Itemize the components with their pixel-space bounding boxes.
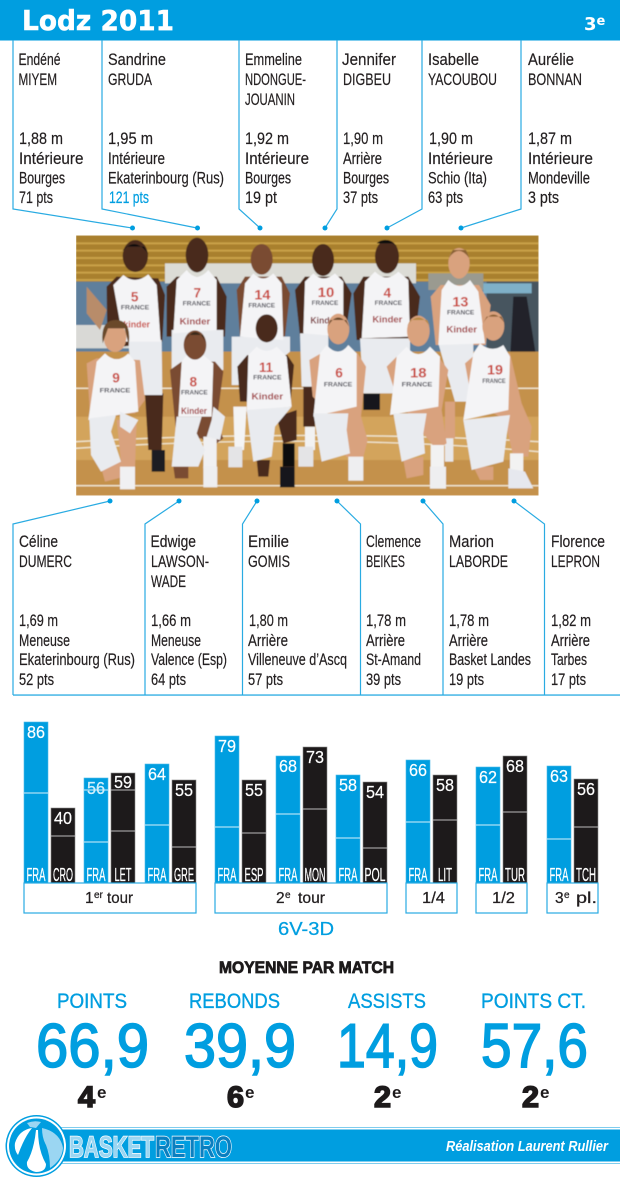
results bar chart xyxy=(24,722,598,885)
player label: Edwige Lawson-Wade: LAWSON- xyxy=(151,552,209,571)
player label: Sandrine Gruda: Intérieure xyxy=(108,149,165,168)
player label: Céline Dumerc: Céline xyxy=(19,532,58,551)
player label: Jennifer Digbeu xyxy=(322,40,396,230)
player 18 kneeling: 18 xyxy=(410,366,427,381)
bar: MON 73: MON xyxy=(304,865,326,885)
player label: Céline Dumerc: 1,69 m xyxy=(19,611,58,630)
player label: Marion Laborde: Arrière xyxy=(449,631,488,650)
bar: FRA 79: 79 xyxy=(218,736,236,756)
player label: Florence Lepron: Florence xyxy=(551,532,605,551)
bar: FRA 68: FRA xyxy=(278,865,298,885)
stat: rebonds: 39,9 xyxy=(184,1012,296,1081)
stat: rebonds xyxy=(184,990,296,1114)
team photo xyxy=(76,235,539,496)
player label: Emilie Gomis xyxy=(242,498,347,695)
player label: Florence Lepron: 1,82 m xyxy=(551,611,591,630)
round box: 1er tour xyxy=(24,883,196,913)
stat: assists: e xyxy=(392,1083,401,1102)
round box: 1/4 xyxy=(406,883,457,913)
bar: GRE 55: GRE xyxy=(174,865,194,885)
player 13 standing: 13 xyxy=(452,295,469,310)
stat: assists: 2 xyxy=(374,1081,391,1114)
player label: Edwige Lawson-Wade: Meneuse xyxy=(151,631,201,650)
logo wordmark: RETRO xyxy=(155,1131,232,1164)
player label: Edwige Lawson-Wade: WADE xyxy=(151,572,186,591)
player label: Clemence Beikes xyxy=(334,498,421,695)
player label: Marion Laborde: 19 pts xyxy=(449,670,484,689)
player 5 standing: FRANCE xyxy=(121,305,149,311)
player 7 standing xyxy=(167,238,227,370)
player label: Isabelle Yacoubou: 1,90 m xyxy=(429,129,473,148)
player label: Clemence Beikes: BEIKES xyxy=(366,552,405,571)
player 10 standing xyxy=(295,244,352,467)
player 13 standing: FRANCE xyxy=(447,310,474,316)
player label: Jennifer Digbeu: Bourges xyxy=(343,168,389,188)
bar: FRA 64: FRA xyxy=(148,865,166,885)
bar: FRA 66: FRA xyxy=(408,865,428,885)
player label: Isabelle Yacoubou: 63 pts xyxy=(428,188,463,207)
bar: TCH 56 xyxy=(574,779,598,885)
bar: FRA 58: 58 xyxy=(339,775,357,795)
player 14 standing xyxy=(228,244,290,467)
player 6 kneeling xyxy=(309,314,368,481)
player label: Emmeline Ndongue-Jouanin: 19 pt xyxy=(245,188,277,207)
round box: 2e tour xyxy=(215,883,387,913)
player 19 kneeling xyxy=(463,311,533,488)
player 8 kneeling: Kinder xyxy=(181,406,207,416)
player 14 standing: FRANCE xyxy=(248,304,275,310)
stat: assists: ASSISTS xyxy=(348,990,426,1013)
title: Lodz 2011 xyxy=(22,5,174,37)
player label: Jennifer Digbeu: 37 pts xyxy=(343,188,378,207)
stat: points xyxy=(36,990,149,1114)
round box: 3e place: pl. xyxy=(576,890,597,907)
player 18 kneeling xyxy=(387,316,448,489)
player 14 standing: 14 xyxy=(254,287,271,302)
player label: Edwige Lawson-Wade xyxy=(145,498,227,695)
player label: Marion Laborde: Marion xyxy=(449,532,494,551)
player label: Isabelle Yacoubou: Intérieure xyxy=(428,149,493,168)
player label: Emilie Gomis: Villeneuve d’Ascq xyxy=(248,650,347,669)
player 4 standing: Kinder xyxy=(372,314,403,324)
bar: LIT 58: 58 xyxy=(436,775,454,795)
player 10 standing: 10 xyxy=(318,285,335,300)
bar: MON 73: 73 xyxy=(306,747,324,767)
round box: 2e tour: tour xyxy=(298,890,325,907)
player label: Emilie Gomis: GOMIS xyxy=(248,552,290,571)
bar: FRA 56: FRA xyxy=(86,865,106,885)
player label: Marion Laborde: Basket Landes xyxy=(449,650,531,669)
stat: points: e xyxy=(97,1083,106,1102)
player label: Jennifer Digbeu: DIGBEU xyxy=(343,70,391,89)
stat: points contre: 57,6 xyxy=(481,1012,588,1081)
round box: 1er tour: tour xyxy=(107,890,133,907)
bar: LIT 58 xyxy=(433,775,457,885)
bar: GRE 55: 55 xyxy=(175,780,193,800)
player label: Sandrine Gruda: Sandrine xyxy=(108,50,166,69)
stat: rebonds: e xyxy=(245,1083,254,1102)
round box: 1/2 xyxy=(476,883,527,913)
stat: points contre: e xyxy=(540,1083,549,1102)
player 5 standing xyxy=(107,240,165,472)
bar: TUR 68: 68 xyxy=(506,756,524,776)
bar: LIT 58: LIT xyxy=(438,865,452,885)
bar: TCH 56: TCH xyxy=(576,865,596,885)
player label: Clemence Beikes: 1,78 m xyxy=(366,611,406,630)
player 8 kneeling: 8 xyxy=(190,374,198,389)
bar: FRA 86 xyxy=(24,722,48,885)
logo wordmark: BASKET xyxy=(69,1131,154,1164)
player 8 kneeling xyxy=(170,330,225,487)
player label: Sandrine Gruda: 121 pts xyxy=(109,188,149,207)
player 10 standing: Kind xyxy=(310,316,330,326)
bar: FRA 64 xyxy=(145,764,169,885)
player label: Jennifer Digbeu: Arrière xyxy=(343,149,382,168)
bar: FRA 56: 56 xyxy=(87,778,105,798)
bar: POL 54: POL xyxy=(364,865,386,885)
player label: Sandrine Gruda: 1,95 m xyxy=(108,129,153,148)
player label: Endéné Miyem: Endéné xyxy=(18,50,60,69)
round box: 1/2: 1/2 xyxy=(492,890,515,907)
player label: Emilie Gomis: Arrière xyxy=(248,631,288,650)
stat: points: 4 xyxy=(78,1081,95,1114)
bar: LET 59 xyxy=(111,772,135,885)
player label: Marion Laborde: 1,78 m xyxy=(449,611,489,630)
bar: FRA 64: 64 xyxy=(148,764,166,784)
player 7 standing: Kinder xyxy=(180,316,211,326)
player label: Aurélie Bonnan: Intérieure xyxy=(528,149,593,168)
bar: ESP 55: ESP xyxy=(244,865,264,885)
header band xyxy=(0,0,620,41)
round box: 1er tour: 1 xyxy=(85,890,94,907)
player 4 standing xyxy=(353,240,420,410)
player label: Céline Dumerc: Ekaterinbourg (Rus) xyxy=(19,650,135,669)
player 11 kneeling: Kinder xyxy=(251,391,284,401)
player label: Emmeline Ndongue-Jouanin: Bourges xyxy=(245,168,291,188)
bar: ESP 55 xyxy=(242,780,266,885)
player label: Aurélie Bonnan: 1,87 m xyxy=(528,129,572,148)
bar: FRA 79: FRA xyxy=(218,865,236,885)
bar: FRA 63: 63 xyxy=(550,766,568,786)
player label: Endéné Miyem: Intérieure xyxy=(19,149,84,168)
player 18 kneeling: FRANCE xyxy=(402,383,432,389)
player label: Clemence Beikes: Arrière xyxy=(366,631,405,650)
heading: moyenne par match: MOYENNE PAR MATCH xyxy=(219,959,394,977)
bar: FRA 86: FRA xyxy=(26,865,46,885)
player label: Florence Lepron xyxy=(512,498,605,695)
record: 6V-3D: 6V-3D xyxy=(278,919,334,939)
stat: rebonds: 6 xyxy=(227,1081,244,1114)
bar: TUR 68 xyxy=(503,756,527,885)
player label: Emmeline Ndongue-Jouanin: JOUANIN xyxy=(245,90,295,109)
player 5 standing: kinder xyxy=(123,320,150,330)
bar: FRA 68: 68 xyxy=(279,756,297,776)
bar: FRA 86: 86 xyxy=(27,722,45,742)
player label: Clemence Beikes: St-Amand xyxy=(366,650,421,669)
bar: FRA 66: 66 xyxy=(409,760,427,780)
player 8 kneeling: FRANCE xyxy=(181,390,208,396)
player label: Endéné Miyem xyxy=(13,40,135,230)
final rank: e xyxy=(596,14,606,29)
stat: points: POINTS xyxy=(57,990,127,1013)
player label: Edwige Lawson-Wade: Edwige xyxy=(150,532,196,551)
player label: Edwige Lawson-Wade: 64 pts xyxy=(151,670,186,689)
bar: FRA 62 xyxy=(476,767,500,885)
player 4 standing: 4 xyxy=(384,285,392,300)
player 13 standing xyxy=(431,248,491,462)
bar: ESP 55: 55 xyxy=(245,780,263,800)
player 6 kneeling: FRANCE xyxy=(324,382,352,388)
stat: points: 66,9 xyxy=(36,1012,149,1081)
player label: Emilie Gomis: Emilie xyxy=(248,532,289,551)
player label: Isabelle Yacoubou: Schio (Ita) xyxy=(428,168,487,188)
player 19 kneeling: 19 xyxy=(487,362,503,377)
bar: FRA 58: FRA xyxy=(338,865,358,885)
bar: CRO 40: 40 xyxy=(54,808,72,828)
stat: points contre: 2 xyxy=(522,1081,539,1114)
bar: FRA 58 xyxy=(336,775,360,885)
bar: GRE 55 xyxy=(172,780,196,885)
player label: Clemence Beikes: 39 pts xyxy=(366,670,401,689)
player label: Céline Dumerc xyxy=(13,498,135,695)
player 19 kneeling: FRANCE xyxy=(482,379,506,385)
player label: Jennifer Digbeu: 1,90 m xyxy=(343,129,383,148)
player label: Emmeline Ndongue-Jouanin: Emmeline xyxy=(245,50,302,69)
player 4 standing: FRANCE xyxy=(375,301,402,307)
player label: Edwige Lawson-Wade: Valence (Esp) xyxy=(151,650,227,669)
player label: Aurélie Bonnan: BONNAN xyxy=(528,70,582,89)
round box: 1/4: 1/4 xyxy=(422,890,445,907)
bar: FRA 79 xyxy=(215,736,239,885)
stat: assists xyxy=(337,990,438,1114)
bar: POL 54 xyxy=(363,782,387,885)
player 5 standing: 5 xyxy=(131,289,139,304)
player label: Endéné Miyem: 71 pts xyxy=(19,188,53,207)
player 9 kneeling: FRANCE xyxy=(100,388,130,394)
stat: assists: 14,9 xyxy=(337,1012,438,1081)
player label: Marion Laborde xyxy=(420,498,531,695)
player label: Sandrine Gruda: Ekaterinbourg (Rus) xyxy=(108,168,224,188)
bar: FRA 63 xyxy=(547,766,571,885)
bar: FRA 63: FRA xyxy=(550,865,568,885)
player 9 kneeling: 9 xyxy=(112,371,120,386)
player label: Emmeline Ndongue-Jouanin: Intérieure xyxy=(245,149,309,168)
stat: points contre xyxy=(481,990,588,1114)
player label: Endéné Miyem: 1,88 m xyxy=(19,129,63,148)
player label: Sandrine Gruda xyxy=(102,40,224,230)
player label: Florence Lepron: Tarbes xyxy=(551,650,587,669)
player 7 standing: 7 xyxy=(194,286,201,301)
logo: basketball xyxy=(6,1115,68,1177)
bar: FRA 62: FRA xyxy=(478,865,498,885)
player 6 kneeling: 6 xyxy=(335,366,343,381)
bar: TCH 56: 56 xyxy=(577,779,595,799)
bar: CRO 40: CRO xyxy=(53,865,73,885)
player label: Florence Lepron: Arrière xyxy=(551,631,590,650)
bar: FRA 56 xyxy=(84,778,108,885)
player label: Céline Dumerc: Meneuse xyxy=(19,631,70,650)
player label: Emilie Gomis: 57 pts xyxy=(248,670,283,689)
player label: Aurélie Bonnan xyxy=(458,40,593,230)
round box: 1er tour: er xyxy=(94,890,104,901)
player label: Marion Laborde: LABORDE xyxy=(449,552,508,571)
player label: Emmeline Ndongue-Jouanin: NDONGUE- xyxy=(245,70,306,89)
player label: Isabelle Yacoubou: Isabelle xyxy=(428,50,479,69)
player 10 standing: FRANCE xyxy=(312,301,338,307)
player 9 kneeling xyxy=(87,320,145,489)
player label: Isabelle Yacoubou: YACOUBOU xyxy=(428,70,497,89)
bar: FRA 68 xyxy=(276,756,300,885)
player label: Aurélie Bonnan: Mondeville xyxy=(528,168,590,188)
player label: Isabelle Yacoubou xyxy=(384,40,497,230)
stat: rebonds: REBONDS xyxy=(189,990,280,1013)
round box: 2e tour: 2 xyxy=(276,890,285,907)
player label: Florence Lepron: LEPRON xyxy=(551,552,600,571)
player label: Emilie Gomis: 1,80 m xyxy=(249,611,288,630)
player 7 standing: FRANCE xyxy=(183,301,211,307)
lower label baseline xyxy=(13,694,620,696)
player label: Céline Dumerc: DUMERC xyxy=(19,552,72,571)
player label: Florence Lepron: 17 pts xyxy=(551,670,586,689)
bar: CRO 40 xyxy=(51,808,75,885)
player label: Clemence Beikes: Clemence xyxy=(366,532,421,551)
bar: TUR 68: TUR xyxy=(505,865,525,885)
bar: FRA 62: 62 xyxy=(479,767,497,787)
player label: Endéné Miyem: Bourges xyxy=(19,168,65,188)
player label: Jennifer Digbeu: Jennifer xyxy=(342,50,396,69)
bar: POL 54: 54 xyxy=(366,782,384,802)
footer banner xyxy=(6,1115,620,1177)
player label: Emmeline Ndongue-Jouanin: 1,92 m xyxy=(245,129,289,148)
bar: LET 59: LET xyxy=(114,865,132,885)
stat: points contre: POINTS CT. xyxy=(481,990,586,1013)
player 11 kneeling xyxy=(237,314,297,487)
bar: LET 59: 59 xyxy=(114,772,132,792)
player 11 kneeling: 11 xyxy=(259,360,273,375)
player 13 standing: Kinder xyxy=(446,324,478,334)
final rank: 3 xyxy=(584,14,597,35)
round box: 3e place xyxy=(547,883,598,913)
round box: 3e place: e xyxy=(564,890,570,901)
bar: FRA 66 xyxy=(406,760,430,885)
bar: MON 73 xyxy=(303,747,327,885)
player label: Aurélie Bonnan: 3 pts xyxy=(528,188,559,207)
player label: Edwige Lawson-Wade: 1,66 m xyxy=(151,611,191,630)
player label: Sandrine Gruda: GRUDA xyxy=(108,70,152,89)
player 11 kneeling: FRANCE xyxy=(253,376,282,382)
player label: Emmeline Ndongue-Jouanin xyxy=(239,40,309,230)
round box: 3e place: 3 xyxy=(555,890,564,907)
player label: Céline Dumerc: 52 pts xyxy=(19,670,54,689)
round box: 2e tour: e xyxy=(285,890,291,901)
player label: Aurélie Bonnan: Aurélie xyxy=(528,50,574,69)
player label: Endéné Miyem: MIYEM xyxy=(18,70,57,89)
